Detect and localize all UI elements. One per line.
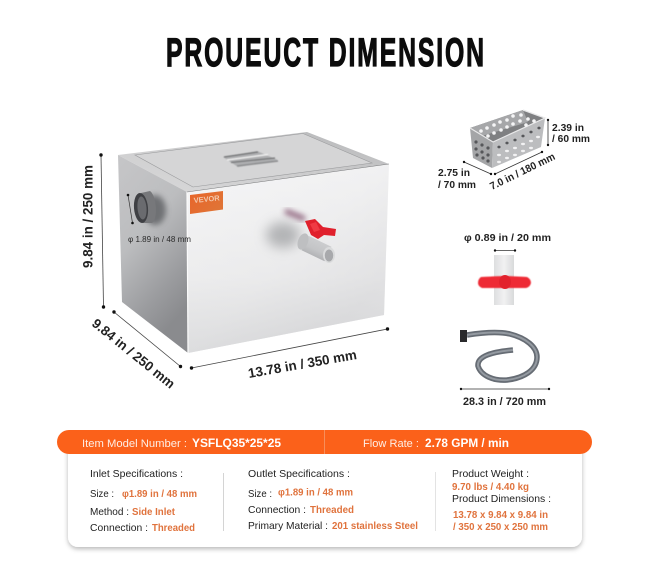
inlet specifications: Inlet Specifications : — [90, 468, 183, 480]
drain hose — [460, 330, 537, 380]
main product: stainless steel grease trap — [118, 132, 389, 353]
specifications card — [57, 430, 592, 547]
basket holes — [479, 113, 536, 138]
orange header bar: Item Model Number : — [82, 438, 187, 450]
product weight and dimensions: Product Dimensions : — [452, 493, 551, 505]
basket dimension: height: / 60 mm — [552, 133, 590, 145]
left side face — [118, 155, 188, 353]
inlet specifications: Size : — [90, 488, 114, 500]
basket back wall — [470, 110, 528, 136]
outlet specifications: 201 stainless Steel — [332, 520, 418, 532]
perforated basket — [470, 110, 545, 168]
dimension: width 13.78 in — [190, 327, 389, 381]
inlet specifications: Side Inlet — [132, 506, 175, 518]
front face — [187, 164, 389, 353]
inlet specifications: Threaded — [152, 522, 195, 534]
inlet specifications — [90, 468, 197, 534]
orange header bar — [57, 430, 592, 454]
basket dimension: height: 2.39 in — [552, 122, 584, 134]
product weight and dimensions: 9.70 lbs / 4.40 kg — [452, 481, 529, 493]
outlet specifications — [248, 468, 418, 532]
basket left end — [470, 128, 493, 168]
product weight and dimensions: 13.78 x 9.84 x 9.84 in — [453, 509, 548, 521]
basket long side — [492, 118, 545, 168]
outlet specifications: φ1.89 in / 48 mm — [278, 486, 353, 498]
spare ball valve — [478, 255, 531, 305]
basket dimension: width: 2.75 in — [438, 167, 470, 179]
orange header bar: YSFLQ35*25*25 — [192, 438, 282, 450]
lid handle — [223, 151, 278, 167]
basket dimension: height — [547, 119, 590, 146]
VEVOR label — [190, 191, 223, 214]
basket interior — [470, 110, 545, 142]
dimension: width 13.78 in: 13.78 in / 350 mm — [247, 347, 358, 381]
orange header bar: Flow Rate : — [363, 438, 419, 450]
basket dimension: width — [438, 161, 492, 191]
outlet specifications: Size : — [248, 488, 272, 500]
side inlet pipe — [133, 191, 166, 225]
VEVOR label: VEVOR — [193, 193, 221, 205]
lid — [135, 134, 372, 187]
basket dimension: length: 7.0 in / 180 mm — [488, 151, 557, 193]
orange header bar: 2.78 GPM / min — [425, 438, 509, 450]
product weight and dimensions — [452, 468, 551, 533]
outlet specifications: Outlet Specifications : — [248, 468, 350, 480]
dimension: height 9.84 in — [80, 153, 105, 309]
outlet specifications: Primary Material : — [248, 520, 328, 532]
inlet specifications: Connection : — [90, 522, 148, 534]
dimension: inlet diameter: φ 1.89 in / 48 mm — [128, 235, 191, 244]
outlet specifications: Connection : — [248, 504, 306, 516]
spare valve diameter label — [464, 232, 551, 252]
dimension: height 9.84 in: 9.84 in / 250 mm — [80, 165, 96, 268]
basket dimension: width: / 70 mm — [438, 179, 476, 191]
spare valve diameter label: φ 0.89 in / 20 mm — [464, 232, 551, 244]
ball valve — [266, 211, 336, 263]
inlet specifications: Method : — [90, 506, 129, 518]
title: PROUEUCT DIMENSION — [166, 31, 484, 76]
hose dimension — [460, 388, 550, 408]
dimension: inlet diameter — [127, 194, 191, 244]
product weight and dimensions: / 350 x 250 x 250 mm — [453, 521, 548, 533]
top face of tank — [118, 132, 389, 192]
hose dimension: 28.3 in / 720 mm — [463, 396, 546, 408]
outlet specifications: Threaded — [310, 504, 354, 516]
inlet specifications: φ1.89 in / 48 mm — [122, 488, 197, 500]
dimension: depth 9.84 in: 9.84 in / 250 mm — [89, 316, 178, 392]
product weight and dimensions: Product Weight : — [452, 468, 529, 480]
